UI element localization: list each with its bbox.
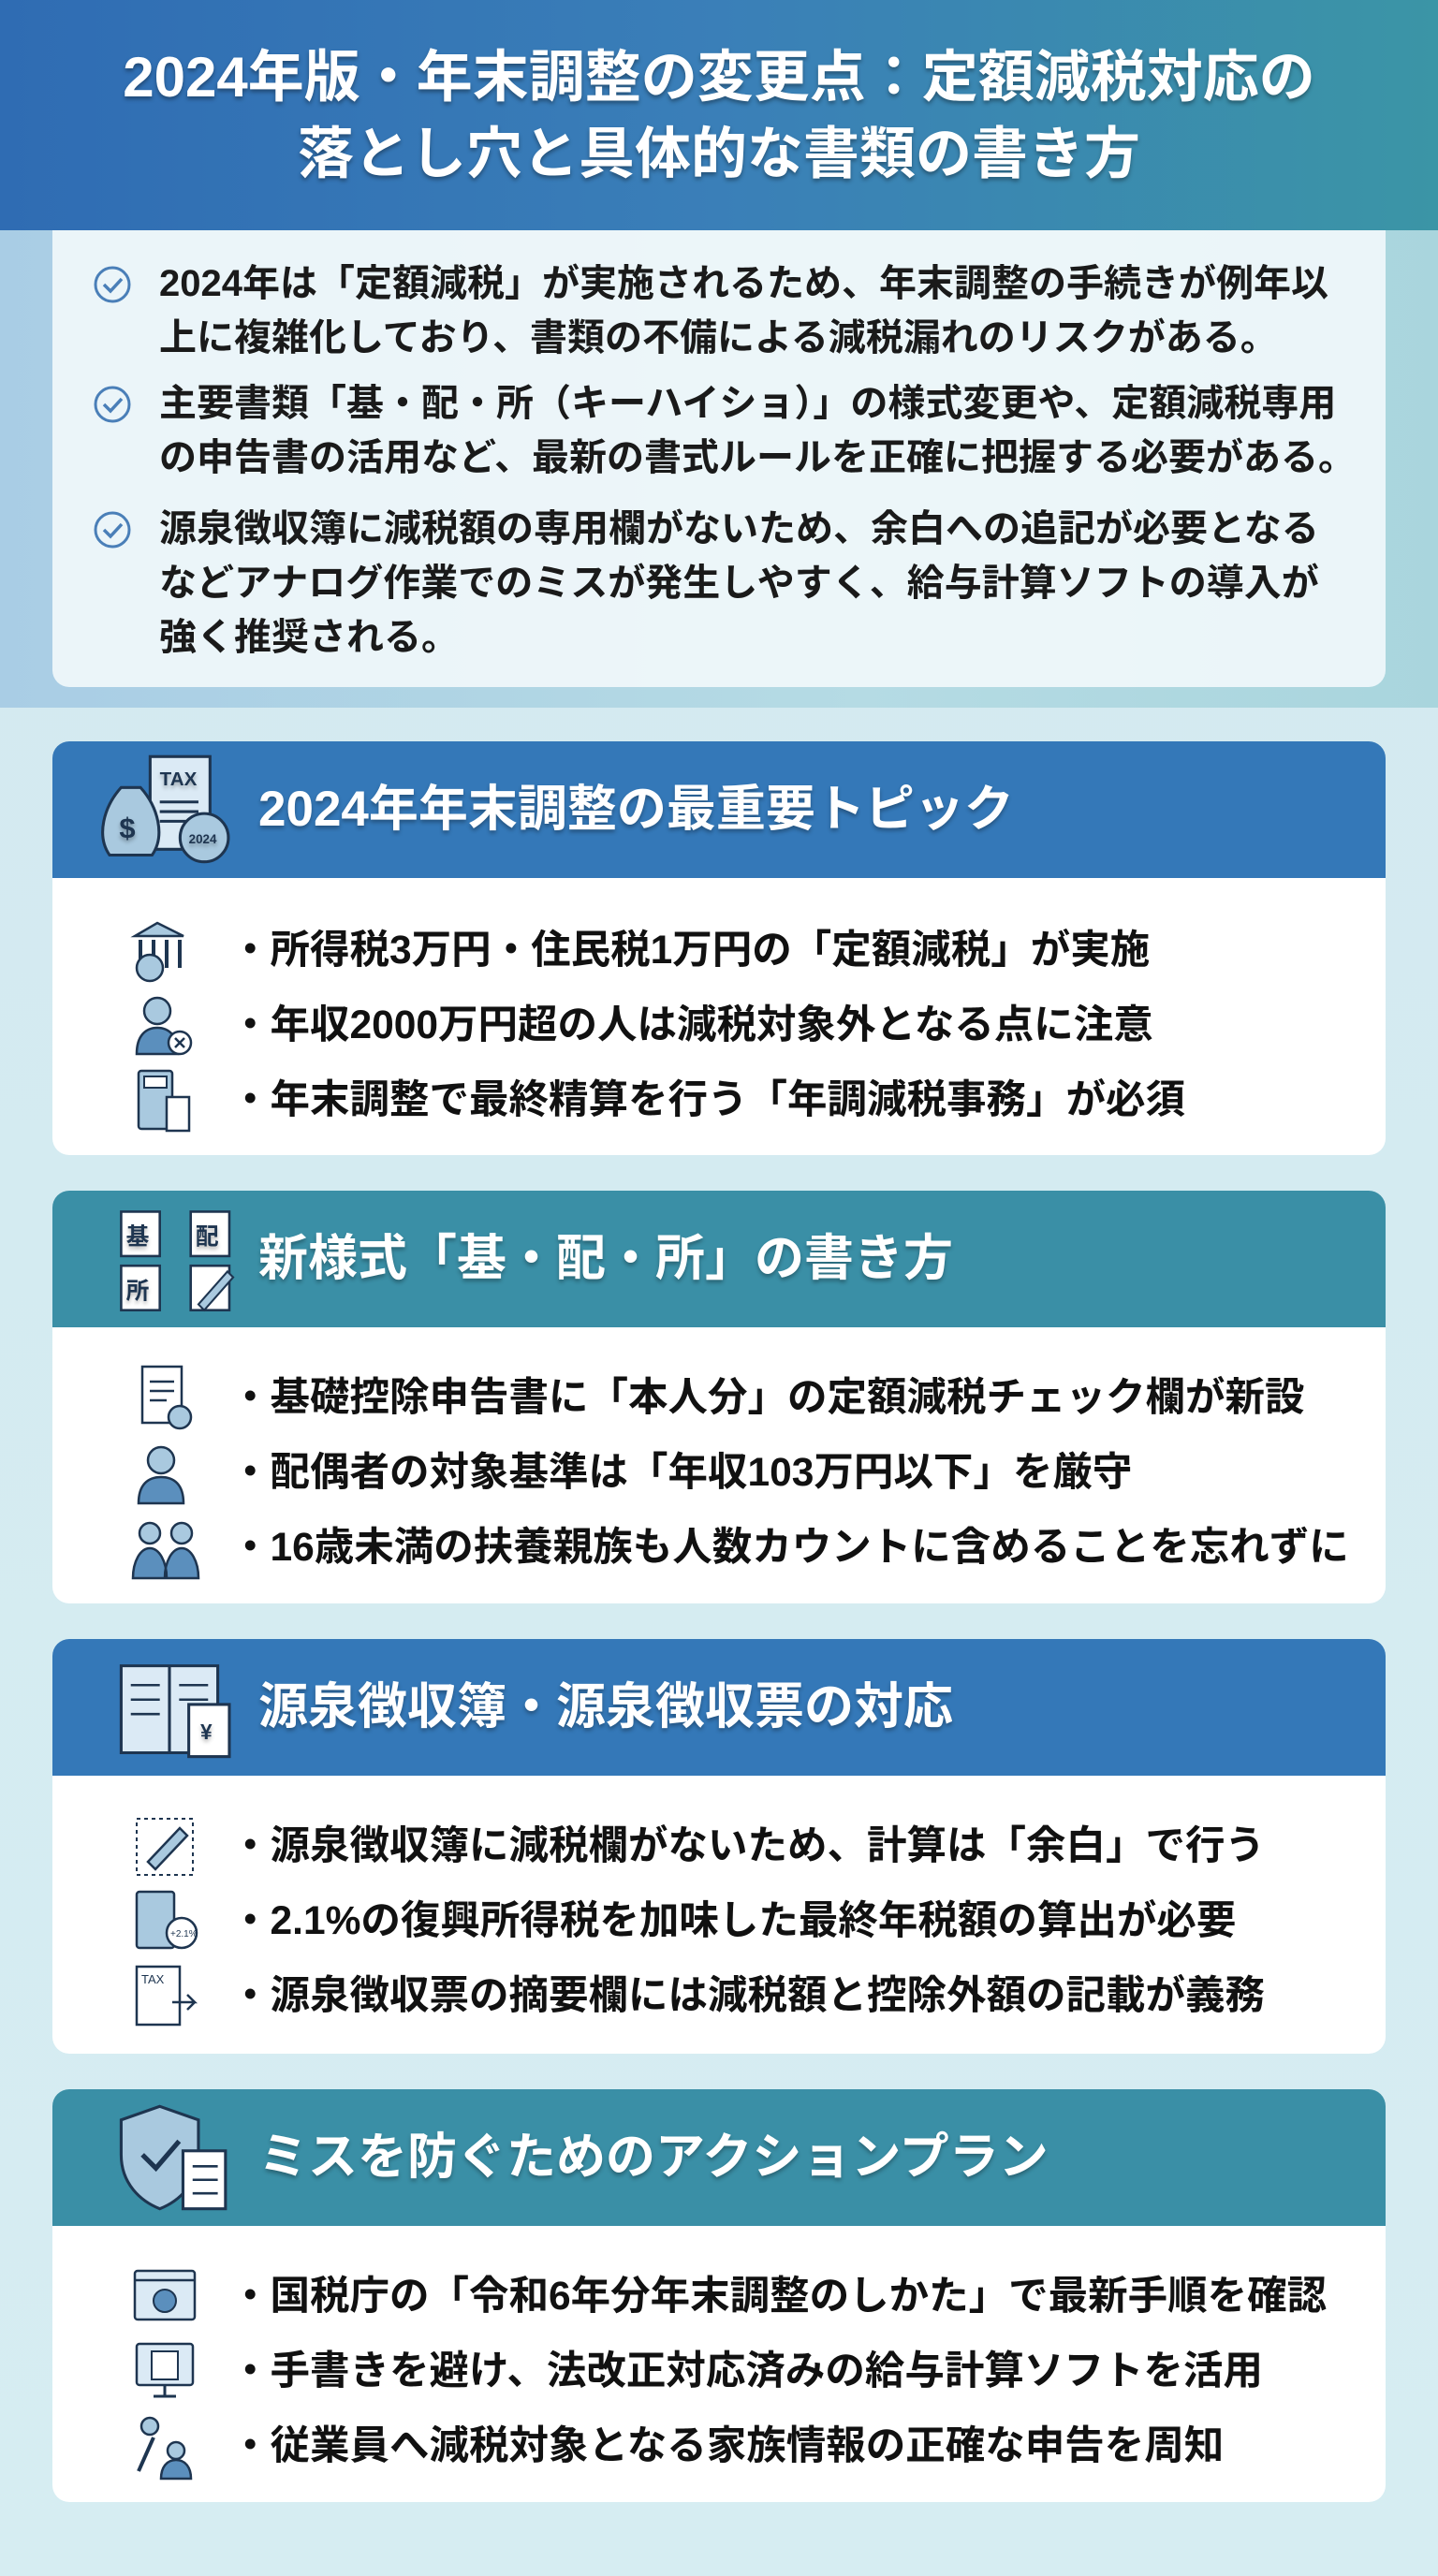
icon: tax money bag: $ [119,812,136,844]
bullet 1 [140,1365,1305,1430]
section 4 header [52,2089,1386,2226]
summary item 2 [94,383,1356,478]
section 2 header: 新様式「基・配・所」の書き方 [258,1231,953,1286]
bullet 1 [131,921,1150,983]
bullet 3: ・年末調整で最終精算を行う「年調減税事務」が必須 [230,1078,1185,1122]
summary item 1: 2024年は「定額減税」が実施されるため、年末調整の手続きが例年以 [159,263,1328,304]
icon: tax money bag: TAX [160,768,198,790]
bullet 2 [135,996,1153,1056]
summary item 3 [94,508,1319,658]
icon: tax money bag [101,754,230,863]
panel: summary [52,230,1386,687]
summary item 2: 主要書類「基・配・所（キーハイショ）」の様式変更や、定額減税専用 [159,383,1336,424]
section 3 header: 源泉徴収簿・源泉徴収票の対応 [258,1679,953,1734]
section 1 header: 2024年年末調整の最重要トピック [258,782,1014,837]
section 3 header [52,1639,1386,1776]
icon: ki hai sho forms: 所 [126,1278,150,1304]
bullet 3 [137,1069,1185,1133]
bullet 2: +2.1% [170,1929,198,1939]
bullet 2: ・配偶者の対象基準は「年収103万円以下」を厳守 [230,1451,1132,1495]
icon: ki hai sho forms: 配 [196,1225,219,1251]
summary item 3: 強く推奨される。 [159,617,459,658]
bullet 3: TAX [141,1972,165,1986]
section 4 header: ミスを防ぐためのアクションプラン [258,2130,1049,2185]
bullet 3: ・従業員へ減税対象となる家族情報の正確な申告を周知 [230,2424,1224,2468]
bullet 2: ・手書きを避け、法改正対応済みの給与計算ソフトを活用 [230,2349,1263,2393]
bullet 1: ・国税庁の「令和6年分年末調整のしかた」で最新手順を確認 [230,2275,1327,2319]
bullet 1: ・基礎控除申告書に「本人分」の定額減税チェック欄が新設 [230,1376,1305,1420]
bullet 1: ・所得税3万円・住民税1万円の「定額減税」が実施 [230,929,1150,973]
bullet 2: ・2.1%の復興所得税を加味した最終年税額の算出が必要 [230,1899,1236,1943]
icon: ledger: ¥ [200,1720,213,1744]
bullet 3 [135,1966,1265,2026]
title: 2024年版・年末調整の変更点：定額減税対応の [123,46,1315,109]
bullet 3 [131,1522,1349,1580]
bullet 3: ・16歳未満の扶養親族も人数カウントに含めることを忘れずに [230,1526,1349,1570]
title: 落とし穴と具体的な書類の書き方 [298,123,1140,185]
summary item 3: 源泉徴収簿に減税額の専用欄がないため、余白への追記が必要となる [159,508,1319,549]
bullet 3 [137,2417,1224,2481]
bullet 1 [136,1818,1265,1876]
title [0,0,1438,230]
bullet 2 [137,1445,1132,1505]
section 2 header [52,1191,1386,1327]
summary item 1: 上に複雑化しており、書類の不備による減税漏れのリスクがある。 [159,317,1278,359]
summary item 2: の申告書の活用など、最新の書式ルールを正確に把握する必要がある。 [159,437,1356,478]
icon: ki hai sho forms [120,1210,234,1312]
section 4 body [52,2226,1386,2502]
icon: tax money bag: 2024 [189,832,217,846]
section 1 body [52,878,1386,1155]
summary item 3: などアナログ作業でのミスが発生しやすく、給与計算ソフトの導入が [159,563,1319,604]
section 1 header [52,741,1386,878]
bullet 3: ・源泉徴収票の摘要欄には減税額と控除外額の記載が義務 [230,1974,1265,2018]
section 3 body [52,1776,1386,2054]
bullet 1: ・源泉徴収簿に減税欄がないため、計算は「余白」で行う [230,1824,1265,1868]
icon: ledger [120,1664,230,1758]
icon: shield checklist [120,2104,227,2211]
bullet 2 [135,1891,1236,1949]
section 2 body [52,1327,1386,1603]
summary item 1 [94,263,1328,359]
bullet 2: ・年収2000万円超の人は減税対象外となる点に注意 [230,1003,1153,1047]
icon: ki hai sho forms: 基 [126,1224,150,1251]
